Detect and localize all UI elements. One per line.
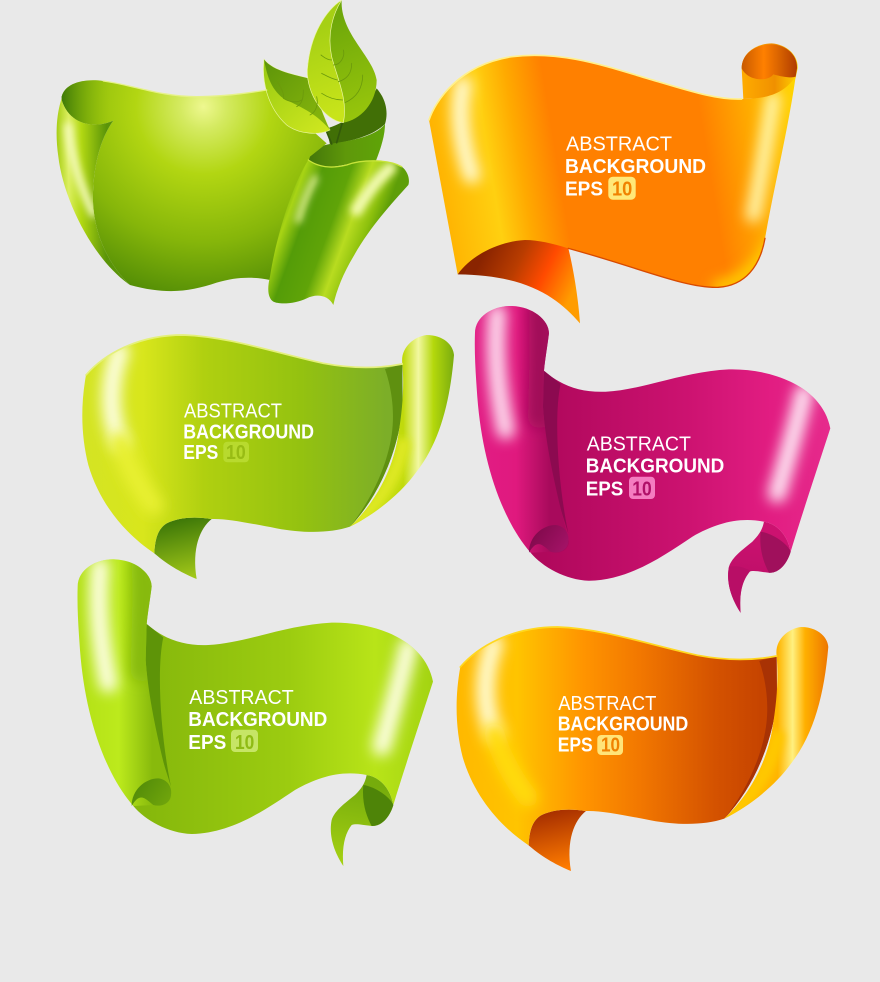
left curl highlight (68, 127, 93, 213)
scroll interior (742, 44, 797, 79)
fold shadow (724, 656, 777, 819)
body highlight (486, 644, 528, 797)
body (133, 623, 433, 834)
tail shade (363, 785, 393, 826)
label: 10 (612, 179, 632, 201)
fold shadow (145, 624, 171, 787)
back curl band (308, 124, 385, 167)
body (429, 55, 796, 287)
fold shadow (542, 371, 568, 533)
banner: orange top right (429, 43, 798, 323)
right leaf light half (307, 0, 345, 123)
label: EPS (188, 732, 226, 754)
label: 10 (601, 735, 620, 757)
bottom rim (568, 238, 765, 287)
scroll back (742, 43, 798, 99)
scroll and body shapes (429, 43, 798, 323)
left scroll (475, 306, 569, 553)
label (565, 134, 706, 201)
orange bottom shapes (457, 627, 828, 871)
body highlight (111, 352, 153, 505)
label: ABSTRACT (558, 693, 656, 715)
label: ABSTRACT (566, 134, 672, 156)
tail lower (728, 566, 751, 613)
label: ABSTRACT (189, 687, 294, 709)
label: BACKGROUND (188, 709, 327, 731)
label: 10 (235, 732, 254, 754)
banner: green scroll (77, 559, 433, 866)
body highlight (777, 393, 804, 493)
label (558, 693, 688, 757)
tail (728, 522, 791, 613)
icon: leaves (263, 0, 377, 144)
top rim (86, 335, 402, 375)
body highlight (382, 647, 408, 747)
green scroll shapes (77, 559, 433, 866)
label: EPS (558, 735, 593, 757)
label (586, 434, 724, 501)
label: 10 (226, 442, 246, 464)
banner: green with leaves (57, 0, 409, 305)
back curl dark interior (327, 88, 387, 145)
left leaf (263, 59, 330, 133)
fold shadow (350, 364, 403, 527)
tail (458, 233, 580, 323)
right leaf (307, 0, 377, 123)
label: BACKGROUND (565, 156, 706, 178)
body (531, 369, 830, 581)
top rim (429, 55, 742, 120)
body (82, 335, 403, 553)
label: EPS (565, 179, 603, 201)
body highlights (460, 85, 778, 287)
veins (277, 50, 363, 115)
banner: orange bottom (457, 627, 828, 871)
label: ABSTRACT (184, 400, 282, 422)
scroll end (529, 525, 569, 553)
label (183, 400, 314, 464)
banner body (62, 80, 327, 291)
left curl (57, 98, 130, 285)
tail (529, 810, 586, 871)
right curl (724, 627, 828, 819)
label: ABSTRACT (587, 434, 691, 456)
left scroll (77, 559, 172, 806)
body rim (103, 81, 267, 97)
left leaf upper half (264, 59, 330, 130)
right curl (350, 335, 454, 527)
label: EPS (586, 479, 623, 501)
label: BACKGROUND (183, 421, 314, 443)
top rim (460, 627, 777, 667)
magenta shapes (475, 306, 830, 613)
body (457, 627, 777, 845)
label: BACKGROUND (586, 456, 724, 478)
banner: lime left (82, 335, 454, 579)
banner: magenta (475, 306, 830, 613)
tail (331, 775, 393, 866)
top-left curl shade (62, 80, 117, 125)
infographic canvas (56, 0, 830, 871)
lime shapes (82, 335, 454, 579)
label (188, 687, 327, 754)
label: 10 (632, 479, 652, 501)
tail shade (760, 532, 791, 573)
front curl (268, 160, 409, 305)
label: BACKGROUND (558, 713, 688, 735)
tail (154, 518, 212, 579)
label: EPS (183, 442, 218, 464)
scroll end (132, 778, 171, 806)
stems (327, 123, 342, 144)
